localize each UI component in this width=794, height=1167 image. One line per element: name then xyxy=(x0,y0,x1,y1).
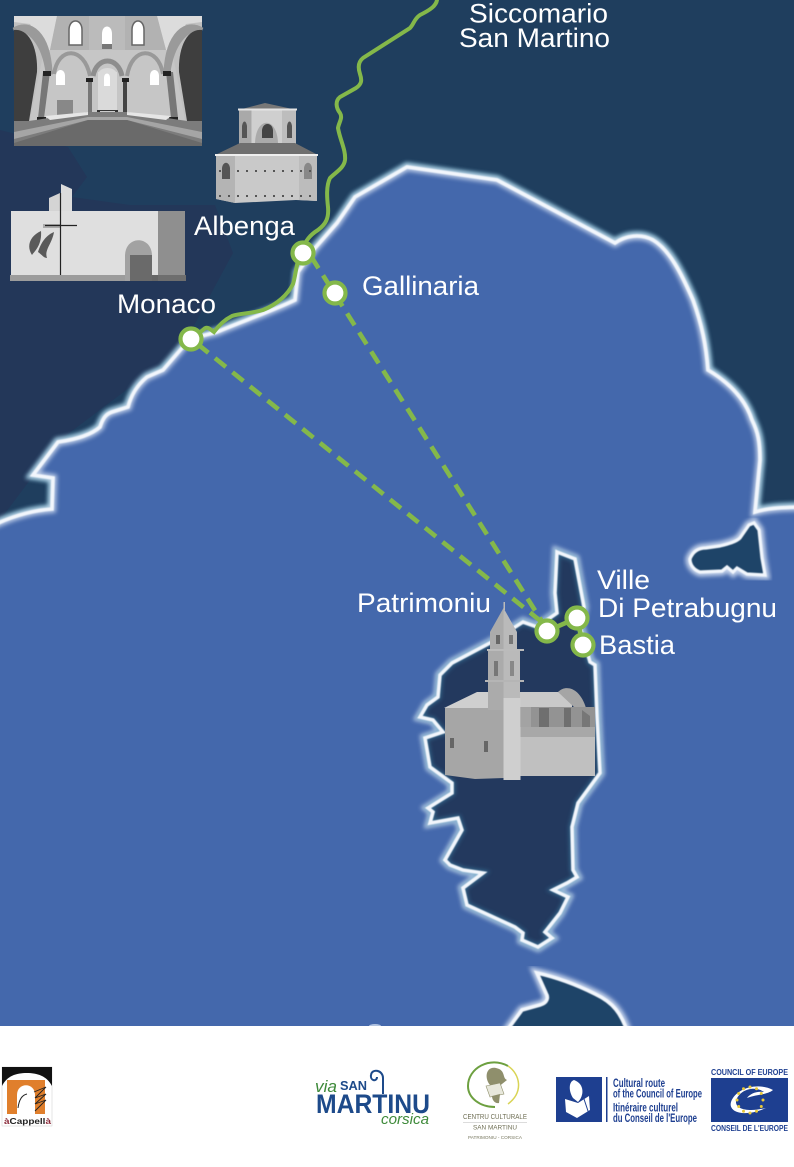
logo: Cultural route of the Council of Europe: Itinéraire culturel xyxy=(613,1100,678,1114)
place labels: Gallinaria xyxy=(362,271,479,301)
logo: Cultural route of the Council of Europe: of the Council of Europe xyxy=(613,1086,702,1100)
place labels: Patrimoniu xyxy=(357,588,491,618)
logo: Cultural route of the Council of Europe: du Conseil de l'Europe xyxy=(613,1111,697,1125)
place labels: Di Petrabugnu xyxy=(598,593,777,623)
logo: a Cappella xyxy=(2,1067,52,1126)
logo: via San Martinu corsica: MARTINU xyxy=(316,1089,430,1119)
illustration: Patrimoniu church xyxy=(444,602,595,780)
logo: Centru Culturale San Martinu: CENTRU CULTURALE xyxy=(463,1114,527,1121)
logo: Centru Culturale San Martinu: PATRIMONIU - CORSICA xyxy=(468,1135,522,1140)
place labels: Albenga xyxy=(194,211,295,241)
island: Elba xyxy=(690,523,765,575)
logo: via San Martinu corsica: corsica xyxy=(381,1111,429,1128)
logo: via San Martinu corsica: via xyxy=(315,1077,337,1096)
place labels: Bastia xyxy=(599,630,675,660)
logo: via San Martinu corsica: SAN xyxy=(340,1078,367,1093)
place labels: San Martino xyxy=(459,23,610,53)
logo: Centru Culturale San Martinu: SAN MARTINU xyxy=(473,1124,517,1132)
illustration: Albenga baptistery interior xyxy=(14,16,202,146)
stop markers xyxy=(180,242,594,656)
island: Corsica xyxy=(420,552,600,947)
place labels xyxy=(117,0,777,660)
route: dashed sea crossings xyxy=(198,256,583,645)
logo: Council of Europe xyxy=(711,1068,789,1133)
place labels: Monaco xyxy=(117,289,216,319)
logo: Centru Culturale San Martinu xyxy=(463,1062,527,1140)
sea with glowing coastline xyxy=(0,167,794,1050)
place labels: Ville xyxy=(597,565,650,595)
footer band xyxy=(0,1026,794,1167)
logo: via San Martinu corsica xyxy=(315,1071,430,1128)
logo: Cultural route of the Council of Europe xyxy=(556,1076,702,1125)
illustration: Albenga baptistery exterior xyxy=(215,103,318,203)
route: solid green trail xyxy=(198,0,437,334)
island: Sardinia tip xyxy=(500,973,630,1040)
illustration: Monaco church xyxy=(10,184,186,281)
logo: a Cappella: àCappell à xyxy=(4,1117,52,1126)
logo: Cultural route of the Council of Europe: Cultural route xyxy=(613,1076,665,1090)
